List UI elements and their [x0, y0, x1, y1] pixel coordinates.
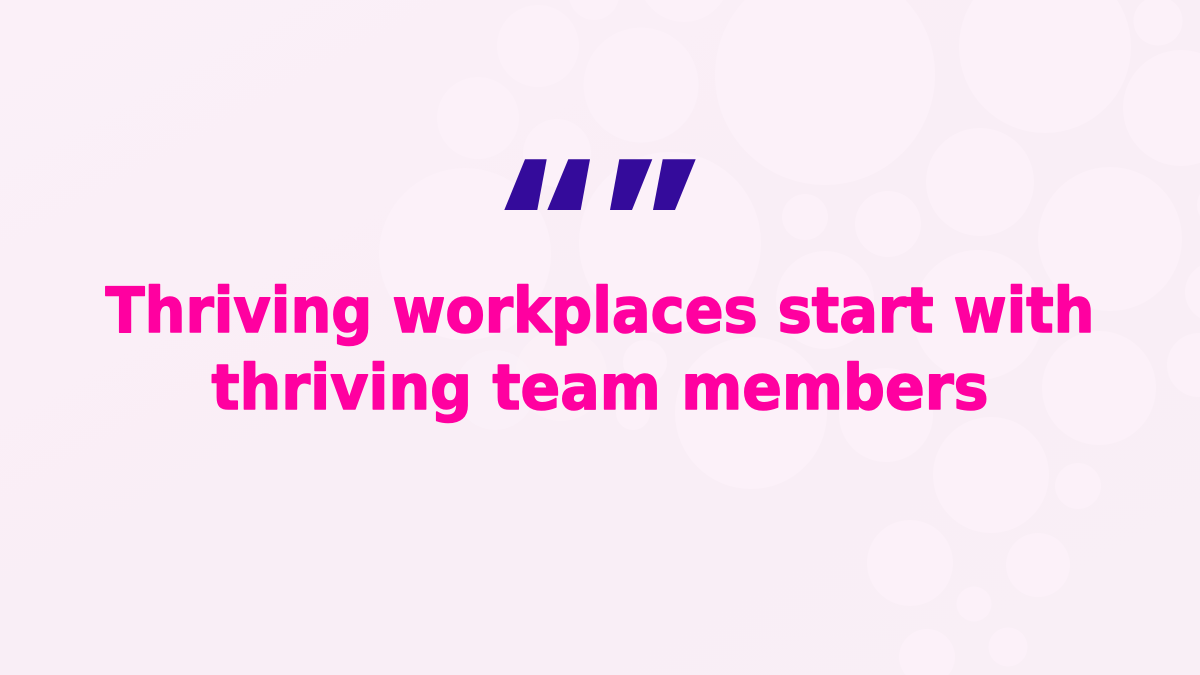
title: thriving team members — [212, 351, 988, 424]
icon: quotation marks — [504, 159, 696, 210]
title: Thriving workplaces start with — [106, 274, 1094, 347]
title — [106, 274, 1094, 424]
decorative circle pattern — [379, 0, 1200, 675]
